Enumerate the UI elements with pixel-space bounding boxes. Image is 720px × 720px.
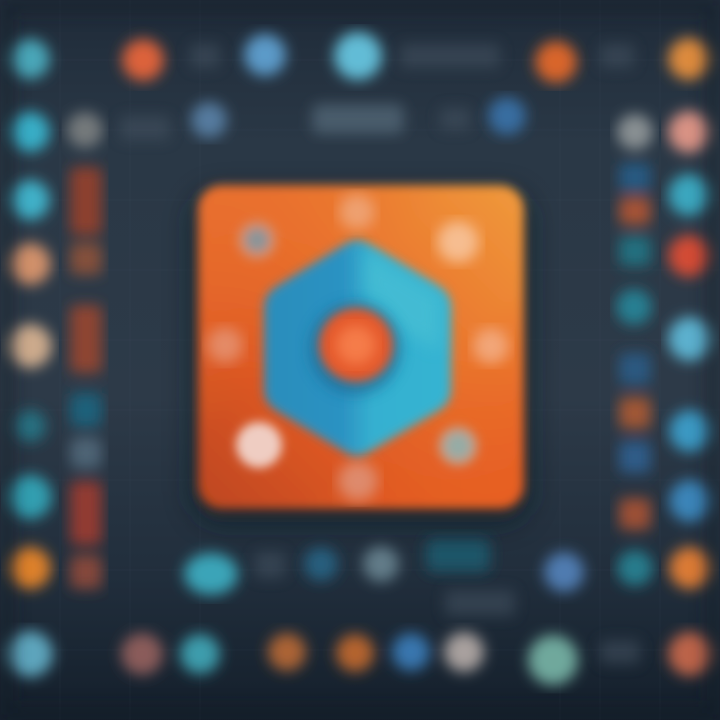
top row of nodes (10, 32, 710, 83)
right column nodes (668, 111, 712, 589)
upper secondary nodes and title blur (191, 97, 526, 138)
panel node: left (207, 327, 243, 363)
panel node: top (339, 194, 375, 230)
center circle (309, 303, 401, 395)
panel node: bottom (338, 461, 378, 501)
lower middle row of nodes (184, 538, 584, 595)
hexagon highlight (365, 250, 440, 350)
central panel shadow (192, 192, 530, 522)
panel node: upper left (237, 220, 277, 260)
panel node: upper right (437, 221, 479, 263)
right inner column blocks (616, 114, 653, 586)
left column nodes (8, 112, 52, 589)
hexagon (264, 240, 451, 456)
central orange panel (198, 185, 524, 509)
panel node: lower right (438, 426, 478, 466)
faint label blocks (120, 0, 720, 664)
panel node: lower left (236, 422, 282, 468)
panel node: right (473, 328, 509, 364)
left inner column bars (67, 112, 103, 589)
bottom row of nodes (7, 631, 712, 685)
